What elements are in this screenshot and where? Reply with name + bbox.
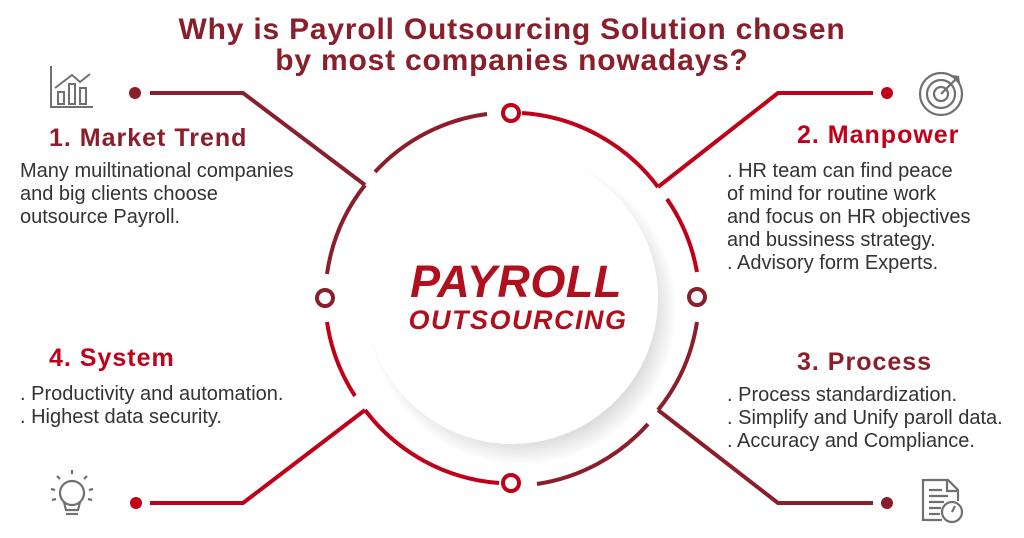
panel: process: . Process standardization.	[727, 384, 957, 406]
panel: manpower: . Advisory form Experts.	[727, 252, 938, 274]
panel: market trend: and big clients choose	[20, 183, 218, 205]
center text	[408, 256, 628, 335]
panel: market trend: outsource Payroll.	[20, 206, 180, 228]
title: Why is Payroll Outsourcing Solution chosen	[178, 13, 846, 46]
icon: chart	[51, 66, 93, 107]
panel: manpower: 2. Manpower	[797, 121, 959, 149]
connector lines	[129, 87, 893, 509]
panel: market trend: 1. Market Trend	[49, 124, 247, 152]
center text: OUTSOURCING	[408, 305, 628, 335]
ring	[317, 105, 705, 491]
panel: market trend	[20, 124, 293, 228]
panel: process	[727, 348, 1003, 452]
title: by most companies nowadays?	[275, 44, 749, 77]
panel: manpower: and bussiness strategy.	[727, 229, 936, 251]
panel: system: . Highest data security.	[20, 406, 222, 428]
panel: process: . Simplify and Unify paroll data.	[727, 407, 1003, 429]
panel: system	[20, 344, 283, 428]
icon: target	[920, 73, 962, 115]
panel: manpower: . HR team can find peace	[727, 160, 953, 182]
panel: market trend: Many muiltinational companies	[20, 160, 293, 182]
panel: manpower	[727, 121, 970, 274]
panel: process: . Accuracy and Compliance.	[727, 430, 975, 452]
center text: PAYROLL	[410, 256, 622, 307]
icon: bulb	[51, 470, 93, 514]
title	[178, 13, 846, 77]
center circle	[366, 152, 677, 465]
panel: manpower: and focus on HR objectives	[727, 206, 970, 228]
panel: system: . Productivity and automation.	[20, 383, 283, 405]
panel: process: 3. Process	[797, 348, 932, 376]
icon: document	[923, 480, 962, 522]
panel: system: 4. System	[49, 344, 175, 372]
panel: manpower: of mind for routine work	[727, 183, 937, 205]
